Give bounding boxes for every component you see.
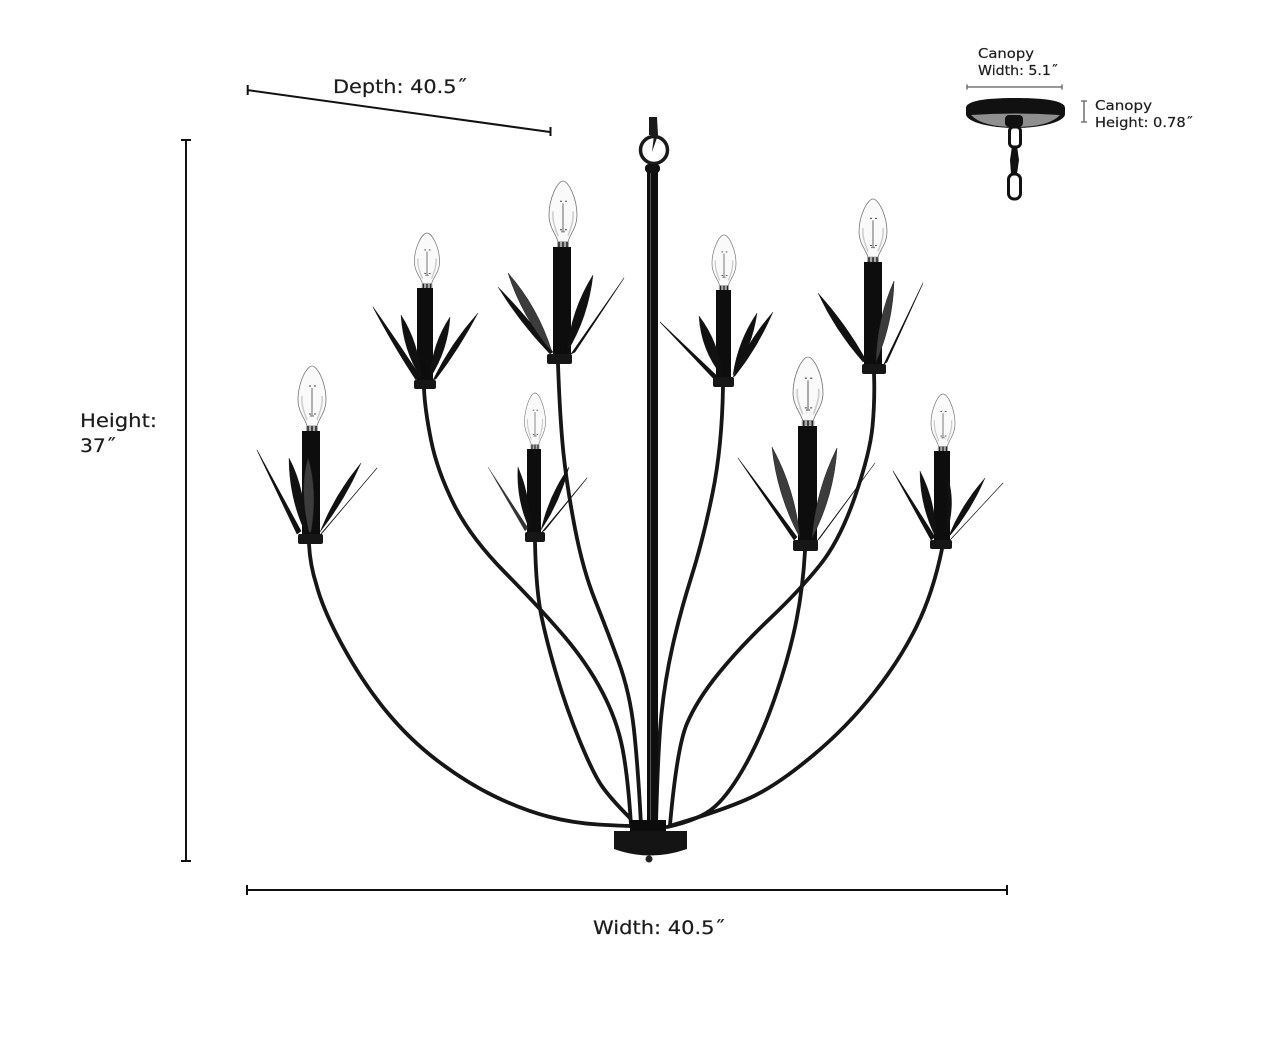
hanging ring and chain (640, 117, 668, 173)
lamp 3 upper center (498, 181, 624, 364)
bulb (859, 199, 887, 262)
width label: Width: 40.5˝ (593, 917, 725, 939)
lamp 2 upper left (373, 233, 478, 389)
canopy height label: Height: 0.78˝ (1095, 115, 1193, 131)
bulb (524, 393, 546, 449)
curved arms (309, 364, 942, 827)
canopy width line (967, 84, 1062, 90)
canopy height label (1095, 98, 1193, 131)
canopy height label: Canopy (1095, 98, 1152, 114)
bulb (414, 233, 440, 288)
canopy width label (978, 46, 1058, 79)
canopy height line (1081, 101, 1087, 122)
bulb (931, 394, 955, 451)
lamp 1 far left (257, 366, 377, 544)
depth label: Depth: 40.5˝ (333, 76, 467, 98)
height dimension line (181, 140, 191, 861)
height label: Height: (80, 410, 157, 432)
depth dimension line (247, 85, 550, 136)
chandelier (257, 117, 1003, 862)
bulb (712, 235, 736, 290)
canopy width label: Width: 5.1˝ (978, 63, 1058, 79)
lamp 4 small inner left (488, 393, 587, 542)
lamp 7 front right (738, 357, 875, 551)
bulb (549, 181, 577, 247)
height label: 37˝ (80, 435, 116, 457)
bulb (298, 366, 326, 431)
width dimension line (247, 885, 1007, 895)
lamp 5 inner right (660, 235, 773, 387)
lamp 8 far right (893, 394, 1003, 549)
lamp 6 upper right (818, 199, 923, 374)
center pole (647, 172, 658, 832)
bulb (793, 357, 823, 426)
canopy plate (966, 98, 1065, 128)
canopy stem and chain (1005, 115, 1023, 199)
canopy inset (966, 46, 1193, 199)
height label (80, 410, 157, 457)
base hub (614, 820, 687, 862)
canopy width label: Canopy (978, 46, 1034, 62)
